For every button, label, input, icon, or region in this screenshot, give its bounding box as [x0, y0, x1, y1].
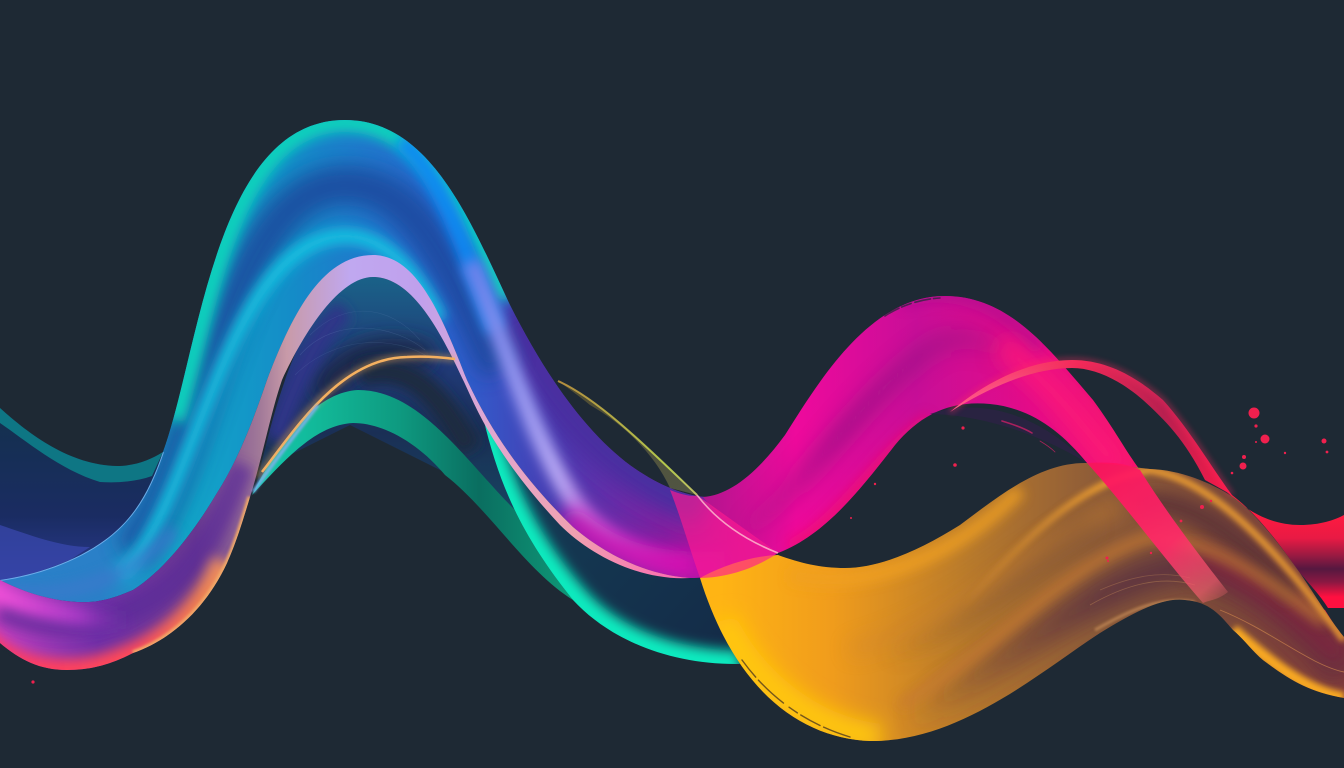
ribbon: pink band crossing the orange — [1087, 463, 1228, 603]
ribbon: red tail on the right — [1225, 490, 1344, 608]
splatter: red dots — [31, 408, 1328, 684]
ribbon: dark region under the lavender arc — [256, 277, 514, 510]
shadow: dark purple edge under magenta wave — [930, 407, 1087, 463]
line: gold arc right — [558, 381, 697, 495]
line: gold arc left — [253, 357, 455, 492]
ribbon: teal lower sweep — [483, 417, 740, 664]
overlap: pink translucent crossing — [670, 490, 778, 578]
ribbon: main blue wave — [0, 120, 778, 602]
ribbon: left dark blue band — [0, 408, 163, 580]
ribbon: magenta wave — [703, 294, 1140, 553]
ribbon: red strip beside the orange edge — [1215, 500, 1344, 640]
ribbon: purple, red and lavender band — [0, 255, 690, 674]
ribbon: green arc — [252, 390, 573, 600]
ribbon: olive translucent band — [558, 381, 697, 495]
ribbon: red arc — [950, 360, 1232, 495]
brush marks: scratches on ribbon edges — [0, 298, 1055, 737]
ribbon: orange wave — [700, 463, 1344, 741]
